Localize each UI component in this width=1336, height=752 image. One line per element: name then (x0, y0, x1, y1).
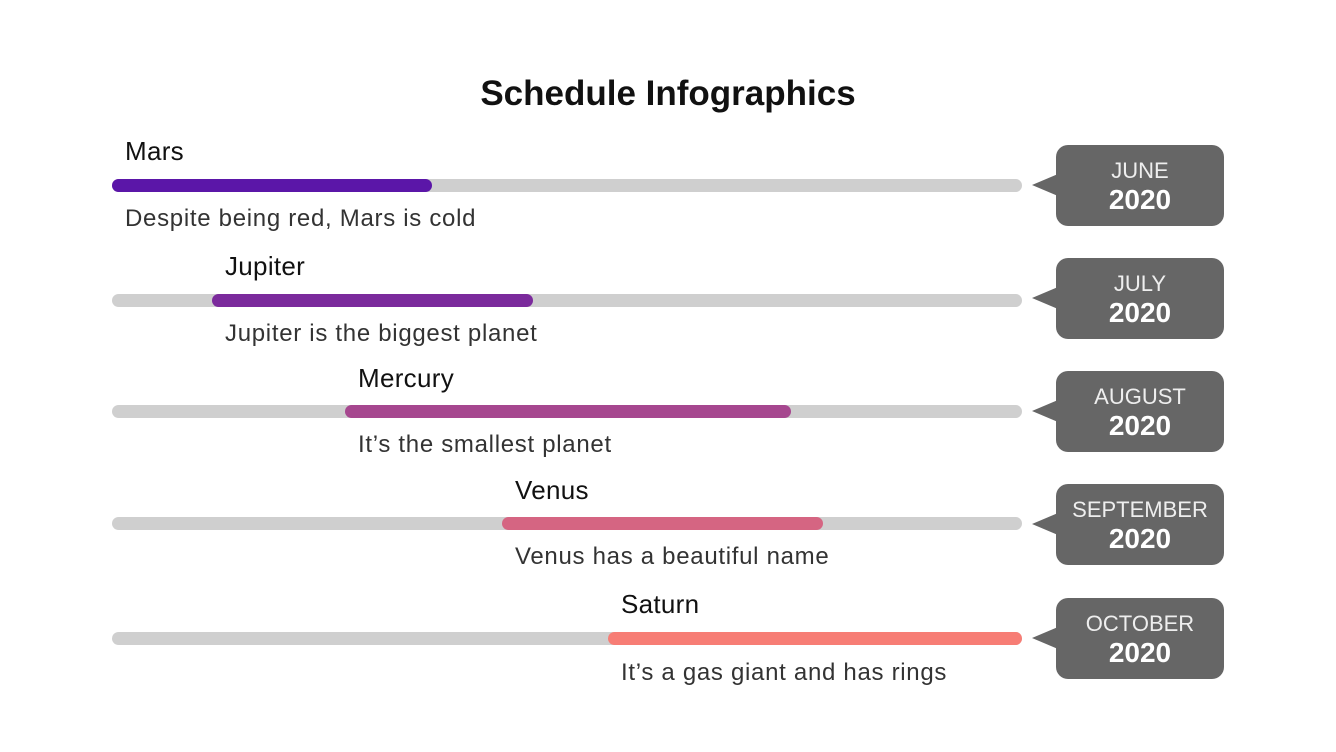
row: Mars (112, 136, 1224, 232)
track (112, 405, 1022, 418)
callout: September 2020: SEPTEMBER (1072, 497, 1208, 522)
track (112, 517, 1022, 530)
bar: Jupiter (212, 294, 533, 307)
callout: August 2020 (1032, 371, 1224, 452)
description: Jupiter is the biggest planet (225, 320, 537, 347)
label: Saturn: Saturn (621, 589, 699, 619)
callout: June 2020 (1032, 145, 1224, 226)
bar: Mars (112, 179, 432, 192)
callout: August 2020: 2020 (1109, 410, 1171, 441)
label: Jupiter: Jupiter (225, 251, 305, 281)
row: Saturn (112, 589, 1224, 686)
callout: October 2020: 2020 (1109, 637, 1171, 668)
bar: Venus (502, 517, 823, 530)
row: Venus (112, 475, 1224, 570)
callout: July 2020 (1032, 258, 1224, 339)
description: It’s the smallest planet (358, 431, 612, 458)
track (112, 632, 1022, 645)
description: It’s a gas giant and has rings (621, 659, 947, 686)
row: Jupiter (112, 251, 1224, 347)
description: Venus has a beautiful name (515, 543, 829, 570)
row: Mercury (112, 363, 1224, 458)
bar: Saturn (608, 632, 1022, 645)
callout: October 2020 (1032, 598, 1224, 679)
callout: October 2020: OCTOBER (1086, 611, 1194, 636)
callout: July 2020: JULY (1114, 271, 1166, 296)
callout: August 2020: AUGUST (1094, 384, 1186, 409)
label: Venus: Venus (515, 475, 589, 505)
label: Mars: Mars (125, 136, 184, 166)
callout: July 2020: 2020 (1109, 297, 1171, 328)
title: Schedule Infographics (480, 74, 856, 113)
label: Mercury: Mercury (358, 363, 454, 393)
callout: September 2020 (1032, 484, 1224, 565)
callout: September 2020: 2020 (1109, 523, 1171, 554)
bar: Mercury (345, 405, 791, 418)
callout: June 2020: 2020 (1109, 184, 1171, 215)
track (112, 179, 1022, 192)
description: Despite being red, Mars is cold (125, 205, 476, 232)
callout: June 2020: JUNE (1111, 158, 1169, 183)
track (112, 294, 1022, 307)
